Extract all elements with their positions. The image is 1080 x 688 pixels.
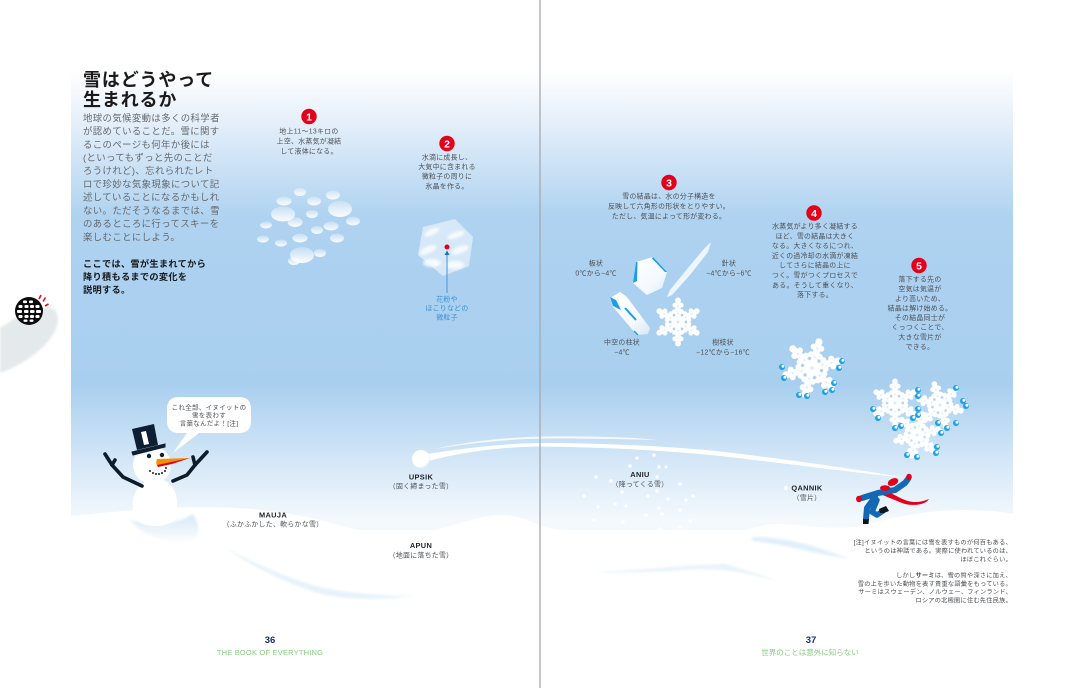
nucleus label: 微粒子	[436, 312, 458, 322]
label: QANNIK: （雪片）	[793, 493, 821, 502]
globe	[15, 295, 48, 325]
snowman head	[133, 446, 171, 484]
step 5 number: 5	[916, 260, 922, 272]
crystal labels: 板状	[589, 258, 603, 268]
snowflake dot by QANNIK	[784, 486, 788, 490]
intro text: ろうけれど)、忘れられたレト	[83, 165, 214, 176]
crystal labels: −4℃	[614, 348, 630, 356]
intro text: 地球の気候変動は多くの科学者	[83, 112, 220, 124]
crystal labels: 0℃から−4℃	[575, 270, 617, 278]
snowman body	[133, 478, 178, 526]
snowball trajectory	[426, 436, 906, 478]
running child catching snow	[856, 474, 929, 524]
snowman hat	[132, 424, 165, 455]
icon: thumbprint with globe	[0, 295, 58, 373]
step 2 text: 氷晶を作る。	[425, 182, 469, 190]
step 4 text: 近くの過冷却の水滴が凍結	[772, 251, 858, 260]
step 2 text: 水滴に成長し、	[422, 152, 472, 162]
speech bubble: これ全部、イヌイットの	[172, 402, 246, 412]
intro text: 楽しむことにしよう。	[83, 232, 180, 242]
big snowflake with melting tips	[775, 331, 849, 405]
coat and legs	[862, 479, 908, 519]
step 4	[772, 205, 858, 299]
page spine	[539, 0, 541, 688]
nucleus label: 花粉や	[436, 294, 458, 304]
step 1 number: 1	[306, 111, 312, 123]
snow ground	[71, 507, 1013, 688]
label: ANIU	[612, 470, 668, 488]
falling snow dots	[582, 453, 695, 531]
footnote: ロシアの北極圏に住む先住民族。	[915, 596, 1012, 604]
footer right: 世界のことは意外に知らない	[761, 647, 859, 657]
label: QANNIK: QANNIK	[791, 484, 823, 492]
footer left	[217, 635, 323, 657]
sky background	[71, 60, 1013, 530]
intro text: 述していることになるかもしれ	[83, 192, 220, 202]
footnote: しかしサーミは、雪の質や深さに加え、	[896, 572, 1012, 580]
snow shadow swishes	[223, 537, 850, 599]
label: APUN: APUN	[410, 541, 432, 550]
step 5 text: くっつくことで、	[891, 324, 949, 332]
intro text: のあるところに行ってスキーを	[83, 218, 219, 229]
footnote: というのは神話である。実際に使われているのは、	[864, 547, 1012, 555]
intro text: (といってもずっと先のことだ	[83, 152, 213, 163]
step 4 text	[772, 222, 858, 299]
label: ANIU: ANIU	[630, 470, 650, 479]
intro bold text	[83, 258, 206, 295]
footer left: THE BOOK OF EVERYTHING	[217, 648, 323, 657]
label: APUN: （地面に落ちた雪）	[389, 550, 453, 560]
step 3 text: 反映して六角形の形状をとりやすい。	[608, 202, 730, 210]
snowman arms	[105, 452, 207, 486]
speech bubble	[167, 397, 251, 453]
ice crystal hexagon	[418, 219, 473, 276]
snowman face	[147, 453, 190, 475]
step 1 text: して液体になる。	[280, 146, 338, 156]
hat and mittens	[856, 474, 912, 502]
crystal: hollow column	[610, 292, 650, 335]
label: MAUJA: （ふかふかした、軟らかな雪）	[223, 520, 323, 528]
step 2	[418, 136, 476, 190]
title: 雪はどうやって	[83, 70, 214, 90]
label: APUN	[389, 541, 453, 560]
step 4 text: ほど、雪の結晶は大きく	[776, 231, 854, 240]
water droplets	[257, 188, 360, 265]
crystal labels: 中空の柱状	[604, 338, 640, 346]
nucleus label: ほこりなどの	[425, 304, 469, 312]
step 2 text	[418, 152, 476, 190]
step 5 text: その結晶同士が	[895, 313, 945, 322]
snowman ground shadow	[130, 514, 198, 543]
step 1 text: 上空、水蒸気が凝結	[277, 136, 341, 146]
footer right	[761, 635, 859, 657]
thumbprint smudge	[0, 308, 58, 373]
label: MAUJA	[223, 510, 323, 528]
label: ANIU: （降ってくる雪）	[612, 480, 668, 488]
step 3 number: 3	[666, 177, 672, 189]
step 3 text: 雪の結晶は、水の分子構造を	[622, 192, 716, 200]
label: QANNIK	[791, 484, 823, 502]
step 2 text: 微粒子の周りに	[422, 172, 472, 180]
step 5 text: 空気は気温が	[898, 284, 942, 293]
step 5 text: 結晶は解け始める。	[888, 304, 952, 312]
scarf	[880, 490, 929, 505]
title	[83, 70, 214, 110]
footnote: 雪の上を歩いた動物を表す貴重な語彙をもっている。	[858, 580, 1012, 588]
crystal labels	[575, 258, 752, 356]
nucleus marker with arrow	[444, 244, 450, 293]
crystal: dendrite	[654, 298, 702, 346]
footer right: 37	[806, 635, 816, 646]
step 2 text: 大気中に含まれる	[418, 162, 476, 171]
step 3 text	[608, 192, 730, 220]
step 4 text: ある。そうして重くなり、	[772, 281, 858, 289]
step 5 text: より高いため、	[895, 294, 945, 303]
snowman	[105, 424, 207, 543]
label: UPSIK	[389, 472, 453, 490]
label: MAUJA: MAUJA	[259, 510, 287, 520]
speech bubble: 言葉なんだよ！[注]	[180, 418, 238, 428]
boots	[863, 506, 889, 524]
step 5 text: できる。	[906, 343, 934, 351]
speech bubble: 雪を表わす	[192, 410, 226, 420]
step 4 text: つく。雪がつくプロセスで	[772, 270, 858, 280]
step 5 text	[888, 274, 952, 351]
step 4 text: 落下する。	[797, 290, 833, 299]
intro bold text: ここでは、雪が生まれてから	[83, 258, 206, 269]
intro bold text: 降り積もるまでの変化を	[83, 271, 187, 282]
cluster of three snowflakes	[870, 375, 970, 465]
crystal labels: 樹枝状	[712, 338, 734, 346]
intro text: るこのページも何年か後には	[83, 139, 210, 150]
nucleus label	[425, 294, 469, 322]
step 4 number: 4	[811, 208, 817, 220]
footnote: [注]イヌイットの言葉には雪を表すものが何百もある、	[854, 538, 1012, 546]
intro text	[83, 112, 220, 242]
snowball	[412, 450, 430, 468]
intro bold text: 説明する。	[83, 284, 130, 295]
intro text: ない。ただそうなるまでは、雪	[83, 205, 220, 216]
step 1 text	[277, 126, 341, 156]
step 1 text: 地上11〜13キロの	[279, 126, 339, 136]
label: UPSIK: （固く締まった雪）	[389, 482, 453, 490]
label: UPSIK: UPSIK	[409, 472, 433, 482]
footnote: サーミはスウェーデン、ノルウェー、フィンランド、	[858, 588, 1012, 596]
intro text: が認めていることだ。雪に関す	[83, 126, 220, 137]
title: 生まれるか	[83, 90, 177, 110]
crystal labels: 針状	[722, 258, 736, 268]
step 2 number: 2	[444, 138, 450, 150]
step 4 text: なる。大きくなるにつれ、	[772, 241, 858, 250]
intro text: ロで珍妙な気象現象について記	[83, 178, 220, 190]
step 5 text: 落下する先の	[898, 274, 942, 284]
footnote: ほぼこれぐらい。	[960, 556, 1012, 564]
step 4 text: してさらに結晶の上に	[779, 260, 851, 270]
snow term labels	[223, 470, 823, 560]
crystal labels: −4℃から−6℃	[706, 270, 752, 278]
crystal: needle	[667, 242, 711, 297]
step 4 text: 水蒸気がより多く凝結する	[772, 222, 858, 230]
step 3 text: ただし、気温によって形が変わる。	[612, 212, 726, 220]
step 5 text: 大きな雪片が	[898, 332, 942, 342]
crystal labels: −12℃から−16℃	[696, 348, 750, 356]
step 3	[608, 175, 730, 220]
step 5	[888, 258, 952, 351]
footer left: 36	[265, 635, 275, 646]
footnote	[854, 538, 1012, 604]
step 1	[277, 109, 341, 156]
crystal: plate	[633, 257, 667, 295]
